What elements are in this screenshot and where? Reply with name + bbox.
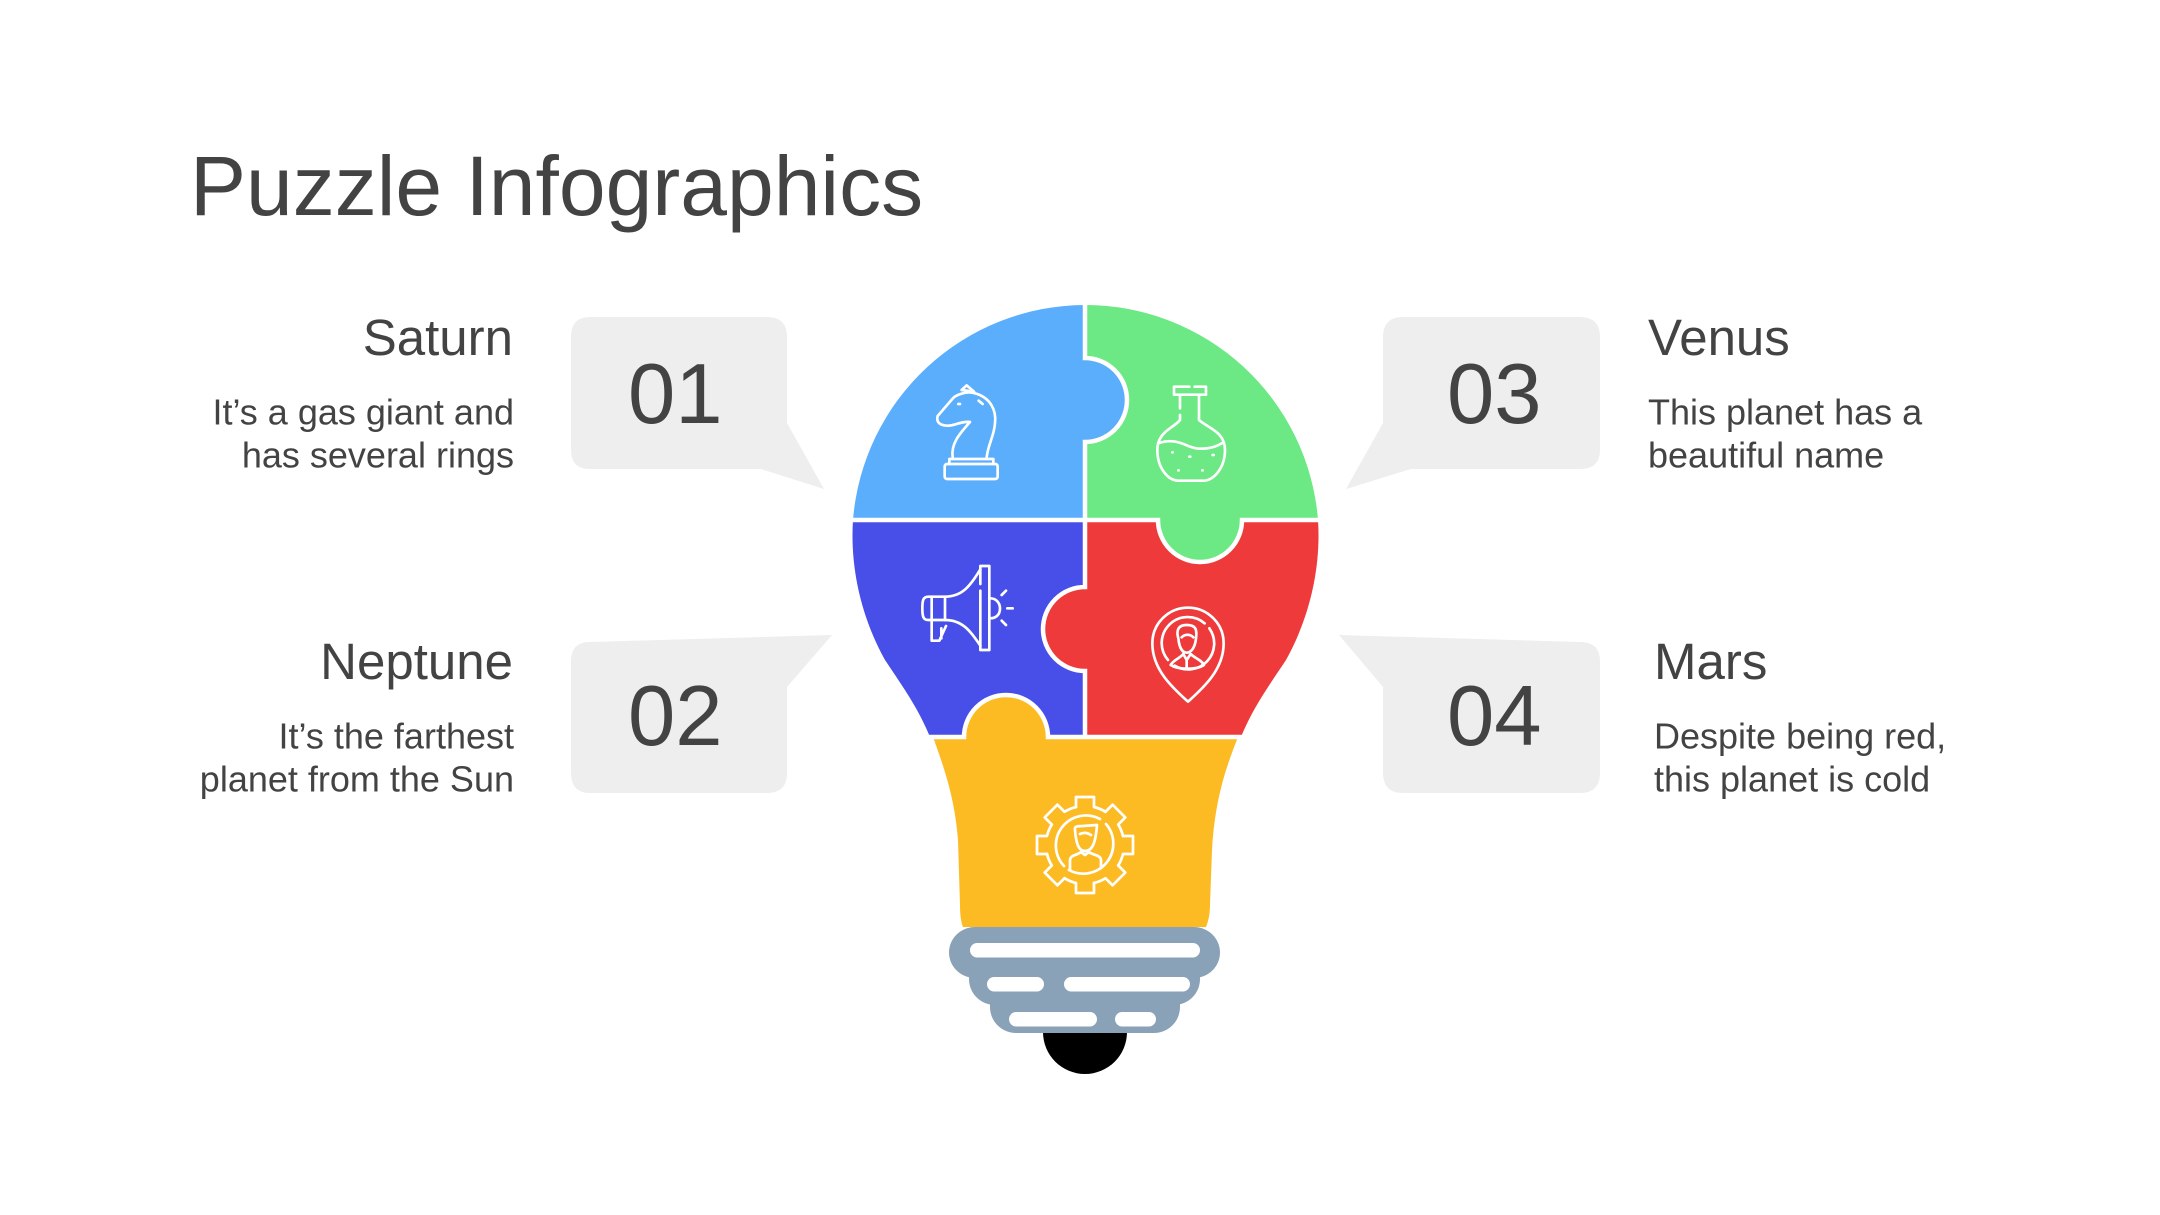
bulb base bbox=[949, 927, 1220, 1033]
callout: 04 bbox=[1339, 635, 1600, 793]
panel: Venus text: Venus bbox=[1648, 309, 1790, 366]
panel: Mars text: Despite being red, bbox=[1654, 716, 1946, 756]
bulb tip bbox=[1043, 990, 1127, 1074]
panel: Venus text bbox=[1648, 309, 1923, 476]
panel: Neptune text: planet from the Sun bbox=[200, 758, 514, 800]
panel: Neptune text bbox=[200, 633, 514, 800]
callout: 03: 03 bbox=[1447, 347, 1542, 442]
panel: Saturn text: It’s a gas giant and bbox=[212, 392, 514, 432]
panel: Saturn text bbox=[212, 309, 514, 476]
panel: Mars text bbox=[1654, 633, 1946, 800]
callout: 03 bbox=[1346, 317, 1600, 489]
icon: flask bbox=[1157, 387, 1225, 481]
light bulb puzzle bbox=[848, 300, 1324, 1074]
puzzle piece: blue bbox=[853, 305, 1127, 520]
puzzle piece: yellow bbox=[933, 695, 1238, 927]
callout: 01: 01 bbox=[628, 347, 723, 442]
panel: Neptune text: Neptune bbox=[320, 633, 513, 690]
panel: Saturn text: Saturn bbox=[363, 309, 513, 366]
puzzle piece: indigo bbox=[852, 520, 1085, 737]
icon: location pin person bbox=[1152, 608, 1224, 702]
panel: Venus text: This planet has a bbox=[1648, 392, 1923, 432]
panel: Mars text: Mars bbox=[1654, 633, 1767, 690]
title: Puzzle Infographics bbox=[190, 139, 923, 233]
panel: Mars text: this planet is cold bbox=[1654, 758, 1930, 800]
icon: gear person bbox=[1037, 797, 1133, 893]
callout: 04: 04 bbox=[1447, 669, 1542, 764]
panel: Venus text: beautiful name bbox=[1648, 434, 1884, 476]
panel: Saturn text: has several rings bbox=[242, 434, 514, 476]
icon: chess knight bbox=[937, 385, 998, 479]
puzzle piece: green bbox=[1085, 305, 1318, 562]
callout: 02: 02 bbox=[628, 669, 723, 764]
panel: Neptune text: It’s the farthest bbox=[279, 716, 514, 756]
puzzle piece: red bbox=[1043, 520, 1319, 737]
icon: megaphone bbox=[922, 566, 1013, 650]
callout: 02 bbox=[571, 635, 832, 793]
callout: 01 bbox=[571, 317, 824, 489]
